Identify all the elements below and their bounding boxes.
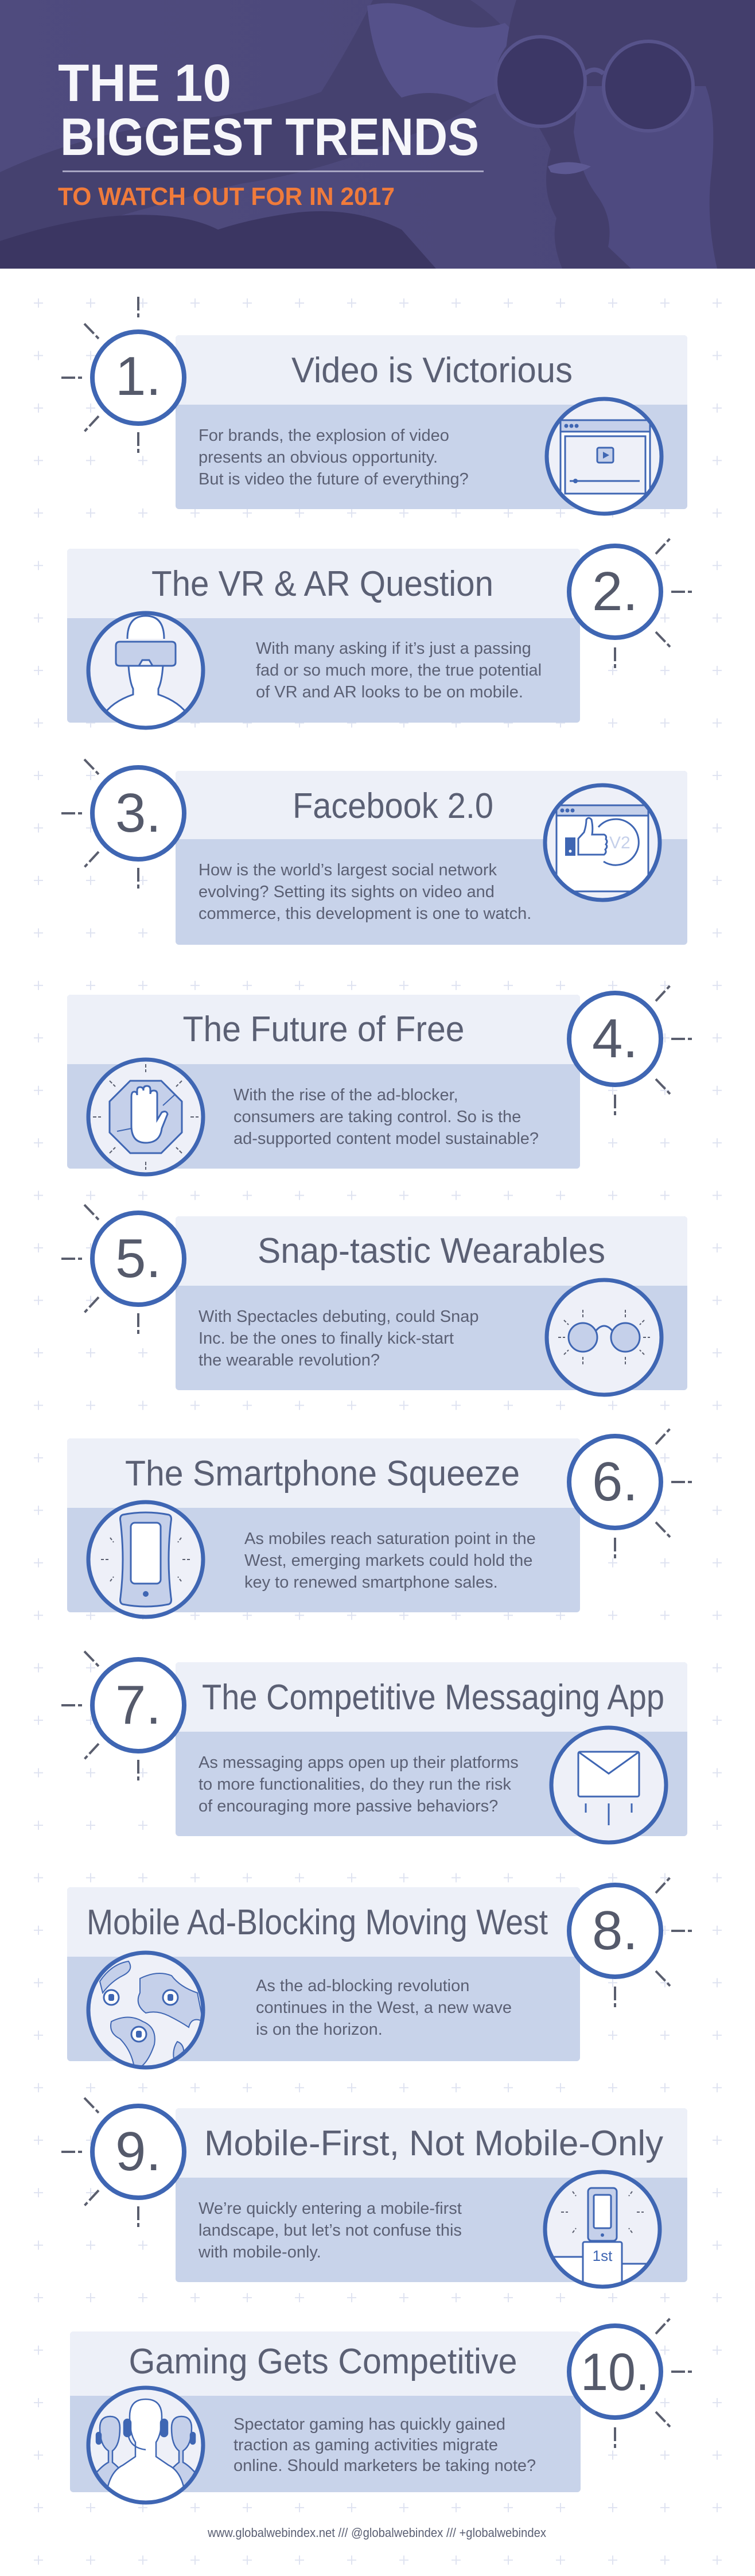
heading: The Smartphone Squeeze xyxy=(125,1454,520,1493)
icon: gamers with headsets xyxy=(88,2388,203,2508)
title: TO WATCH OUT FOR IN 2017 xyxy=(58,183,395,211)
photo: face xyxy=(505,0,755,269)
icon: phone on podium xyxy=(545,2172,660,2298)
text block: traction as gaming activities migrate xyxy=(233,2436,498,2454)
text block: presents an obvious opportunity. xyxy=(199,448,438,467)
heading: The Future of Free xyxy=(182,1010,465,1049)
text block: evolving? Setting its sights on video and xyxy=(199,883,495,901)
title xyxy=(58,54,484,211)
text block: of encouraging more passive behaviors? xyxy=(199,1797,498,1815)
title: THE 10 xyxy=(58,54,231,112)
number 7: 7. xyxy=(115,1674,161,1736)
text block: landscape, but let’s not confuse this xyxy=(199,2221,462,2240)
text block: with mobile-only. xyxy=(198,2243,321,2261)
photo: arm xyxy=(0,0,516,253)
text block: For brands, the explosion of video xyxy=(199,426,449,445)
icon: globe xyxy=(88,1953,203,2067)
text block: With many asking if it’s just a passing xyxy=(256,639,531,658)
number 10: 10. xyxy=(581,2343,649,2402)
footer: www.globalwebindex.net /// @globalwebindex /// +globalwebindex xyxy=(207,2525,546,2540)
icon: stop hand xyxy=(88,1060,203,1174)
number 1: 1. xyxy=(115,346,161,407)
heading: Snap-tastic Wearables xyxy=(258,1231,605,1271)
number 5 xyxy=(61,1205,184,1335)
heading: The VR & AR Question xyxy=(151,564,493,604)
heading: The Competitive Messaging App xyxy=(202,1678,664,1717)
heading: Gaming Gets Competitive xyxy=(129,2342,517,2381)
heading: Facebook 2.0 xyxy=(293,786,493,826)
text block: As messaging apps open up their platforms xyxy=(199,1753,519,1772)
number 3 xyxy=(61,759,184,890)
text block: As mobiles reach saturation point in the xyxy=(244,1530,536,1548)
panel: future of free xyxy=(67,995,580,1169)
icon: facebook thumbs up: V2 xyxy=(609,833,631,852)
heading: Mobile Ad-Blocking Moving West xyxy=(87,1903,548,1942)
number 9: 9. xyxy=(115,2121,161,2182)
text block: Spectator gaming has quickly gained xyxy=(233,2415,505,2434)
photo: mouth xyxy=(548,162,591,174)
panel: smartphone squeeze xyxy=(67,1438,580,1612)
text block: West, emerging markets could hold the xyxy=(244,1551,532,1570)
number 6 xyxy=(569,1429,693,1559)
number 8 xyxy=(569,1877,693,2008)
text block: fad or so much more, the true potential xyxy=(256,661,542,680)
text block: of VR and AR looks to be on mobile. xyxy=(256,683,523,701)
text block: ad-supported content model sustainable? xyxy=(233,1130,539,1148)
number 10 xyxy=(569,2318,693,2449)
text block: commerce, this development is one to watch. xyxy=(199,905,531,923)
photo: glasses xyxy=(496,37,693,131)
heading: Video is Victorious xyxy=(291,351,573,390)
number 2: 2. xyxy=(592,561,638,622)
icon: squeezed phone xyxy=(88,1502,203,1617)
number 4: 4. xyxy=(592,1008,638,1069)
text block: consumers are taking control. So is the xyxy=(233,1108,521,1126)
number 4 xyxy=(569,986,693,1116)
text block: is on the horizon. xyxy=(256,2020,383,2039)
header banner xyxy=(0,0,755,269)
number 3: 3. xyxy=(115,782,161,844)
panel: snap-tastic wearables xyxy=(176,1216,687,1390)
panel: video is victorious xyxy=(176,335,687,509)
text block: key to renewed smartphone sales. xyxy=(244,1573,498,1592)
panel: VR AR xyxy=(67,549,580,723)
number 7 xyxy=(61,1651,184,1782)
icon: VR headset person xyxy=(88,613,203,734)
panel: competitive messaging app xyxy=(176,1662,687,1836)
text block: But is video the future of everything? xyxy=(199,470,469,488)
number 6: 6. xyxy=(592,1451,638,1512)
panel: gaming gets competitive xyxy=(70,2331,581,2492)
icon: phone on podium: 1st xyxy=(593,2247,613,2264)
panel: mobile ad-blocking xyxy=(67,1887,580,2061)
text block: With Spectacles debuting, could Snap xyxy=(199,1308,478,1326)
text block: With the rise of the ad-blocker, xyxy=(233,1086,458,1104)
text block: continues in the West, a new wave xyxy=(256,1999,512,2017)
panel: facebook 2.0 xyxy=(176,771,687,945)
photo: shoulder xyxy=(0,211,436,269)
heading: Mobile-First, Not Mobile-Only xyxy=(204,2124,663,2163)
text block: We’re quickly entering a mobile-first xyxy=(199,2199,462,2218)
text block: How is the world’s largest social network xyxy=(199,861,497,879)
icon: spectacles xyxy=(547,1280,661,1395)
icon: video player xyxy=(547,399,661,518)
number 9 xyxy=(61,2098,184,2228)
number 1 xyxy=(61,297,184,454)
text block: online. Should marketers be taking note? xyxy=(233,2457,536,2475)
icon: envelope xyxy=(551,1728,666,1842)
number 5: 5. xyxy=(115,1228,161,1289)
title: BIGGEST TRENDS xyxy=(60,108,479,166)
text block: Inc. be the ones to finally kick-start xyxy=(199,1329,454,1348)
text block: As the ad-blocking revolution xyxy=(256,1977,469,1995)
text block: to more functionalities, do they run the risk xyxy=(199,1775,511,1794)
number 2 xyxy=(569,538,693,669)
number 8: 8. xyxy=(592,1900,638,1961)
panel: mobile-first xyxy=(176,2108,687,2282)
text block: the wearable revolution? xyxy=(199,1351,380,1370)
icon: facebook thumbs up xyxy=(545,785,660,900)
